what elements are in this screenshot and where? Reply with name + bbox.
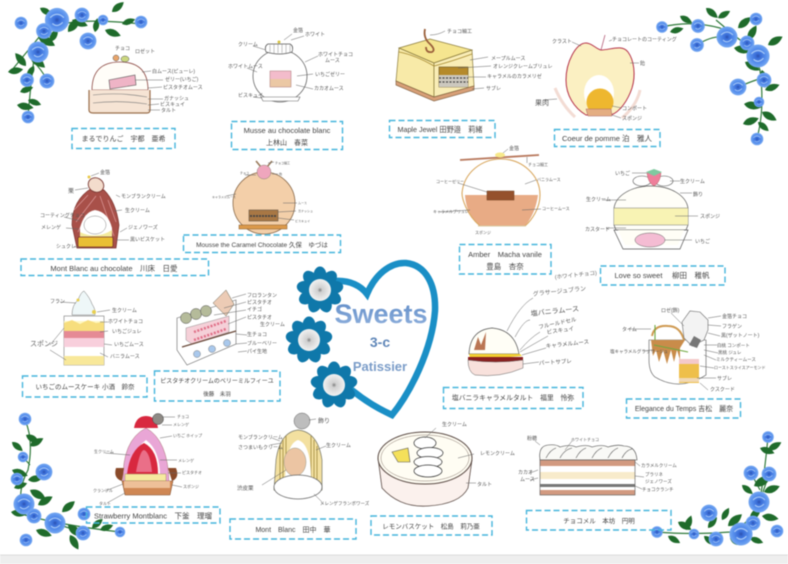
- name label: [184, 235, 340, 252]
- card: Strawberry Montblanc: [86, 414, 220, 523]
- illustration: 飴: [279, 171, 282, 176]
- name label: [626, 399, 740, 418]
- central heart logo: [285, 263, 435, 415]
- illustration: オレンジクレームブリュレ: [493, 63, 552, 70]
- illustration: キャラメルムース: [545, 338, 589, 350]
- illustration: フルールドセル: [538, 316, 578, 331]
- name label: いちごのムースケーキ 小酒 鈴奈: [36, 382, 135, 391]
- illustration: 生クリーム: [112, 307, 137, 314]
- name label: ピスタチオクリームのベリーミルフィーユ: [160, 377, 274, 385]
- decoration: top-right blue roses: [656, 5, 784, 145]
- illustration: スポンジ: [700, 213, 720, 220]
- name label: Coeur de pomme 泊 雅人: [562, 133, 653, 143]
- illustration: スポンジ: [183, 483, 199, 489]
- illustration: フロランタン: [247, 292, 277, 299]
- three blue flowers: [285, 266, 358, 409]
- illustration: [468, 270, 597, 376]
- illustration: バニラムース: [110, 354, 140, 360]
- illustration: サブレ: [717, 375, 732, 382]
- illustration: 生クリーム: [260, 321, 285, 328]
- illustration: モンブランクリーム: [121, 193, 166, 200]
- name label: [526, 510, 671, 530]
- name label: Mont Blanc au chocolate 川床 日愛: [50, 263, 178, 273]
- illustration: フラゲン: [722, 323, 742, 330]
- illustration: ジェノワーズ: [645, 478, 672, 485]
- illustration: カラメルクリーム: [641, 463, 677, 469]
- illustration: モンブランクリーム: [238, 434, 283, 441]
- illustration: さつまいもクリーム: [238, 444, 283, 451]
- illustration: ミルクティームース: [716, 357, 756, 363]
- illustration: プラリネ: [645, 472, 663, 478]
- illustration: チョコレートのコーティング: [612, 36, 677, 43]
- illustration: 飾り: [318, 418, 330, 425]
- illustration: キャラメルムース: [212, 194, 236, 199]
- illustration: ホワイトチョコ: [108, 319, 143, 325]
- card: 塩バニラキャラメルタルト: [444, 270, 597, 408]
- illustration: チョコ細工: [528, 161, 548, 167]
- illustration: チョコ: [240, 170, 249, 175]
- name label: [554, 130, 660, 146]
- name label: Amber Macha vanile: [468, 250, 542, 259]
- illustration: [396, 28, 552, 101]
- illustration: キャラメルブリュレ: [433, 208, 469, 214]
- name label: [460, 244, 551, 274]
- illustration: ゼリー(いちご): [165, 76, 199, 83]
- illustration: タイム: [622, 326, 637, 333]
- illustration: タルト: [161, 107, 176, 114]
- illustration: 果肉: [535, 98, 549, 107]
- illustration: ホワイトムース: [228, 64, 263, 70]
- illustration: チョコ細工: [447, 28, 472, 35]
- illustration: チョコクランチ: [642, 487, 674, 493]
- illustration: いちご: [695, 238, 710, 245]
- illustration: カカオムース: [314, 86, 344, 92]
- illustration: 生クリーム: [326, 442, 351, 449]
- illustration: メレンゲ: [41, 224, 61, 231]
- name label: Mont Blanc 田中 華: [255, 525, 331, 534]
- illustration: スポンジ: [30, 340, 58, 348]
- illustration: [177, 290, 285, 365]
- illustration: 塩バニラムース: [530, 304, 579, 318]
- name label: [21, 259, 208, 276]
- illustration: スポンジ: [622, 115, 642, 122]
- illustration: [40, 169, 166, 250]
- illustration: [237, 413, 370, 507]
- illustration: ブルーベリー: [247, 340, 277, 347]
- illustration: 栗: [68, 188, 74, 195]
- illustration: スポンジ: [475, 229, 491, 235]
- illustration: 生クリーム: [442, 421, 467, 428]
- illustration: 金箔: [293, 27, 303, 34]
- card: ピスタチオクリームのベリーミルフィーユ: [154, 290, 285, 401]
- illustration: キャラメルのカラメリゼ: [487, 73, 542, 80]
- name label: [390, 120, 495, 138]
- illustration: ビスキュイ: [238, 92, 263, 99]
- illustration: いちご ホイップ: [173, 432, 202, 438]
- illustration: [93, 414, 202, 506]
- card: いちごのムースケーキ: [22, 291, 147, 397]
- illustration: [535, 35, 677, 122]
- illustration: ホワイトチョコ: [571, 437, 599, 442]
- card: Amber Macha vanile: [433, 145, 570, 274]
- illustration: [433, 145, 570, 235]
- name label: 豊島 杏奈: [486, 261, 524, 271]
- illustration: メレンゲ: [173, 421, 189, 427]
- illustration: ピスタチオムース: [163, 84, 203, 91]
- illustration: ムース: [325, 58, 340, 64]
- illustration: メープルムース: [491, 56, 525, 62]
- illustration: 黒(ザットノート): [721, 333, 760, 339]
- illustration: コーヒーゼリー: [436, 178, 464, 184]
- name label: 塩バニラキャラメルタルト 福里 怜弥: [452, 393, 574, 402]
- card: まるでりんご: [72, 46, 203, 148]
- name label: レモンバスケット 松島 莉乃亜: [382, 522, 480, 530]
- name label: [232, 122, 342, 150]
- illustration: 渋皮栗: [237, 484, 254, 492]
- illustration: 飴: [640, 60, 645, 67]
- illustration: 白ムース(ピューレ): [152, 68, 195, 75]
- subtitle: Patissier: Patissier: [353, 359, 407, 374]
- illustration: パイ生地: [247, 348, 267, 355]
- illustration: クリーム: [238, 42, 258, 48]
- illustration: サブレ: [486, 85, 501, 92]
- name label: まるでりんご 宇都 亜希: [82, 134, 166, 143]
- illustration: [212, 160, 313, 234]
- card: Elegance du Temps: [610, 307, 765, 418]
- heart outline: [335, 263, 435, 415]
- name label: Maple Jewel 田野邉 莉緒: [397, 125, 483, 134]
- illustration: チョコ: [177, 414, 189, 419]
- illustration: フラン: [50, 299, 65, 305]
- card: Coeur de pomme: [535, 35, 677, 146]
- illustration: バニラムース: [537, 176, 561, 182]
- illustration: クラスト: [552, 39, 572, 45]
- illustration: ピスタチオ: [247, 314, 272, 321]
- card: Mousse the Caramel Chocolate: [184, 160, 340, 252]
- illustration: ホワイトチョコ: [318, 52, 353, 58]
- illustration: チョコ: [115, 46, 130, 52]
- illustration: グラサージュブラン: [532, 284, 586, 298]
- name label: 上林山 春菜: [266, 138, 308, 147]
- illustration: ホワイト: [305, 32, 325, 38]
- illustration: ガナッシュ: [298, 208, 313, 213]
- illustration: [585, 169, 720, 249]
- decoration: top-left blue roses: [7, 0, 147, 123]
- illustration: クスクード: [710, 387, 735, 393]
- decoration: bottom-left blue roses: [10, 413, 125, 551]
- card: Musse au chocolate blanc: [228, 27, 353, 150]
- illustration: コーティングチョコ: [40, 212, 85, 219]
- illustration: 黒桃 ジュレ: [718, 349, 742, 356]
- illustration: いちご: [615, 170, 630, 177]
- illustration: レモンクリーム: [480, 451, 515, 457]
- illustration: [89, 46, 203, 114]
- illustration: イチゴ: [247, 306, 262, 313]
- card: Maple Jewel: [390, 28, 552, 138]
- illustration: 黒いビスケット: [130, 236, 165, 243]
- illustration: シュクレ: [56, 244, 76, 250]
- illustration: 金箔チョコ: [722, 313, 747, 320]
- name label: Elegance du Temps 吉松 麗奈: [635, 404, 733, 413]
- illustration: ロゼット: [135, 48, 155, 55]
- illustration: メレンゲフランボワーズ: [320, 500, 370, 507]
- illustration: 金箔: [509, 145, 519, 152]
- illustration: [228, 27, 353, 102]
- illustration: ビスキュイ: [546, 324, 575, 336]
- illustration: (ホワイトチョコ): [554, 270, 597, 281]
- bottom grey strip: [0, 555, 788, 564]
- illustration: ジェノワーズ: [128, 224, 158, 231]
- card: Love so sweet: [585, 169, 725, 285]
- name label: Love so sweet 柳田 稚帆: [614, 270, 710, 280]
- illustration: [518, 435, 677, 495]
- illustration: いちごジュレ: [112, 328, 142, 335]
- illustration: [610, 307, 765, 393]
- illustration: ガナッシュ: [164, 95, 189, 102]
- illustration: 生クリーム: [586, 196, 611, 203]
- illustration: メレンゲ: [178, 457, 194, 463]
- illustration: ピスタチオ: [247, 299, 272, 306]
- illustration: カカオ: [518, 470, 533, 476]
- illustration: 粉糖: [527, 435, 537, 442]
- illustration: クランブル: [93, 487, 113, 493]
- illustration: カスタード: [585, 226, 610, 233]
- illustration: 生チョコ: [247, 331, 267, 338]
- card: チョコメル: [518, 435, 677, 530]
- illustration: 塩キャラメルグラッサージュ: [610, 348, 668, 355]
- illustration: パートサブレ: [539, 357, 572, 367]
- illustration: ビスキュイ: [160, 101, 185, 108]
- name label: Musse au chocolate blanc: [244, 126, 331, 135]
- illustration: ロゼ(飾): [661, 307, 680, 314]
- card: Mont Blanc au chocolate: [21, 169, 208, 276]
- illustration: 生クリーム: [94, 448, 114, 454]
- name label: Mousse the Caramel Chocolate 久保 ゆづは: [196, 240, 328, 249]
- name label: Strawberry Montblanc 下釜 理瑠: [94, 510, 212, 520]
- illustration: タルト: [99, 500, 111, 506]
- illustration: いちごムース: [114, 341, 144, 348]
- illustration: 生クリーム: [125, 207, 150, 214]
- card: Mont Blanc: [230, 413, 370, 539]
- subtitle: 3-c: 3-c: [370, 334, 390, 350]
- illustration: [378, 421, 515, 506]
- illustration: [30, 291, 144, 365]
- illustration: ムース: [298, 200, 307, 205]
- illustration: 白桃 コンポート: [717, 342, 750, 349]
- illustration: ピスタチオ: [182, 469, 202, 475]
- illustration: ムース: [520, 477, 535, 483]
- card: レモンバスケット: [371, 421, 515, 535]
- title: Sweets: Sweets: [334, 299, 428, 329]
- illustration: いちごゼリー: [315, 71, 345, 78]
- decoration: bottom-right blue roses: [651, 431, 783, 548]
- name label: [154, 371, 280, 401]
- illustration: ローストスライスアーモンド: [714, 364, 765, 370]
- name label: 後藤 未羽: [203, 390, 231, 398]
- name label: [444, 388, 583, 408]
- name label: チョコメル 本坊 円明: [563, 516, 635, 525]
- illustration: 金箔: [100, 169, 110, 176]
- illustration: チョコ細工: [275, 160, 290, 165]
- illustration: 飾り: [693, 191, 703, 198]
- illustration: 生クリーム: [680, 178, 705, 185]
- illustration: ビスキュイ: [295, 218, 310, 223]
- illustration: コーヒームース: [542, 206, 570, 211]
- illustration: コンポート: [622, 105, 647, 112]
- illustration: タルト: [477, 481, 492, 488]
- name label: [371, 516, 492, 535]
